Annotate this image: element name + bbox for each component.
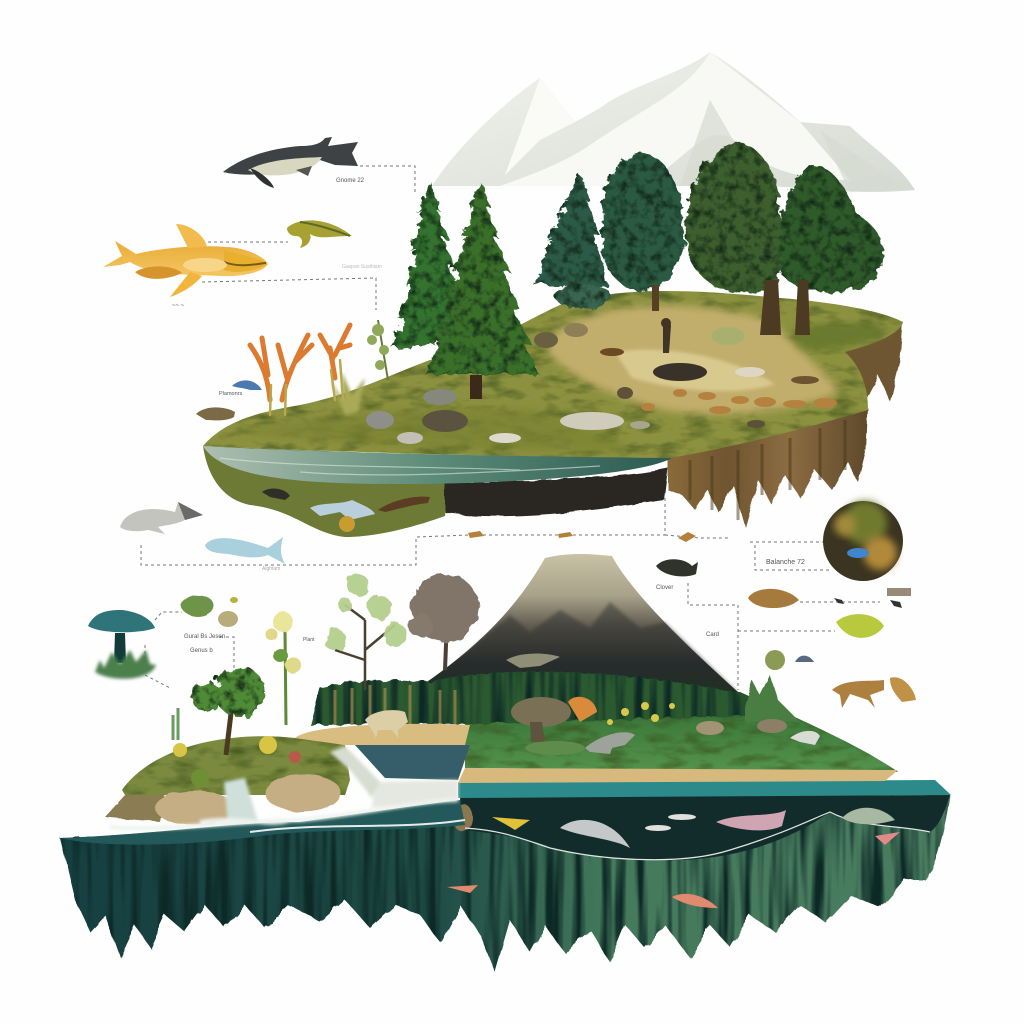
- pool and waterfall: [224, 745, 470, 825]
- underground animals: [262, 489, 430, 532]
- beach strip: [458, 768, 898, 783]
- foam river: [60, 800, 465, 845]
- connector lines: [141, 166, 880, 690]
- label: ~~ ~: [172, 303, 185, 309]
- green ground section: [203, 446, 450, 537]
- mountains: [432, 52, 915, 192]
- upper island: [203, 142, 903, 537]
- dark water body: [460, 795, 950, 860]
- right cliff: earth roots: [800, 322, 903, 402]
- grey fish: [120, 502, 203, 534]
- grass shading: [230, 407, 625, 452]
- right reeds: [745, 675, 800, 722]
- mushroom: [88, 610, 156, 679]
- grass surface: [203, 291, 903, 458]
- small species right: [468, 531, 916, 708]
- water lens: [203, 446, 672, 484]
- rocks: [105, 774, 473, 832]
- rocks: [366, 323, 745, 444]
- label: Genus b: [190, 648, 213, 654]
- conifer right: [425, 182, 540, 375]
- label: Clover: [656, 585, 673, 591]
- conifer trunk: [470, 375, 482, 399]
- globe: [823, 501, 903, 581]
- left grass plateau: [122, 736, 350, 795]
- label: Plamonrs: [219, 391, 242, 397]
- wave outline: [465, 812, 930, 860]
- dark trees: [533, 152, 684, 309]
- label: Gural Bs Jesen: [184, 634, 225, 640]
- volcano: [415, 554, 738, 692]
- underwater layered base: [60, 795, 950, 972]
- blue creature: [232, 380, 262, 390]
- vegetation at volcano foot: [310, 672, 770, 725]
- label: Plant: [303, 637, 315, 643]
- grass green plain: [465, 692, 898, 772]
- green fish: [287, 220, 352, 248]
- golden fish: [103, 224, 268, 297]
- moss and leaves: [182, 595, 238, 627]
- sea creatures: [447, 808, 900, 908]
- whale: [223, 137, 358, 188]
- tree trunk: [652, 285, 659, 311]
- trees and plants on lower island: [173, 574, 479, 787]
- label: Balanche 72: [766, 559, 805, 566]
- brown turtle: [196, 407, 235, 420]
- teal water strip: [458, 780, 951, 798]
- volcano dark ridges: [430, 602, 738, 692]
- conifer left: [392, 182, 462, 348]
- label: Alghtam: [262, 566, 280, 572]
- pale blue fish: [205, 537, 285, 564]
- reed colour strokes: [335, 685, 455, 725]
- small sapling: [367, 320, 389, 380]
- white foam lines: [110, 800, 458, 828]
- animals on plain: [365, 654, 820, 755]
- grass tufts: [330, 372, 365, 415]
- sandy clearing: [546, 306, 840, 414]
- orange corals: [250, 325, 350, 415]
- sand: [295, 724, 470, 745]
- herd of small animals: [600, 318, 837, 428]
- broad trees: [686, 142, 883, 293]
- label: Card: [706, 632, 719, 638]
- secondary foam: [250, 820, 465, 832]
- label: Gaspan Susthiam: [342, 264, 382, 270]
- soil section: [445, 468, 668, 516]
- broad tree trunks: [760, 280, 810, 335]
- label: Gnome 22: [336, 178, 365, 184]
- lower island: [60, 554, 951, 972]
